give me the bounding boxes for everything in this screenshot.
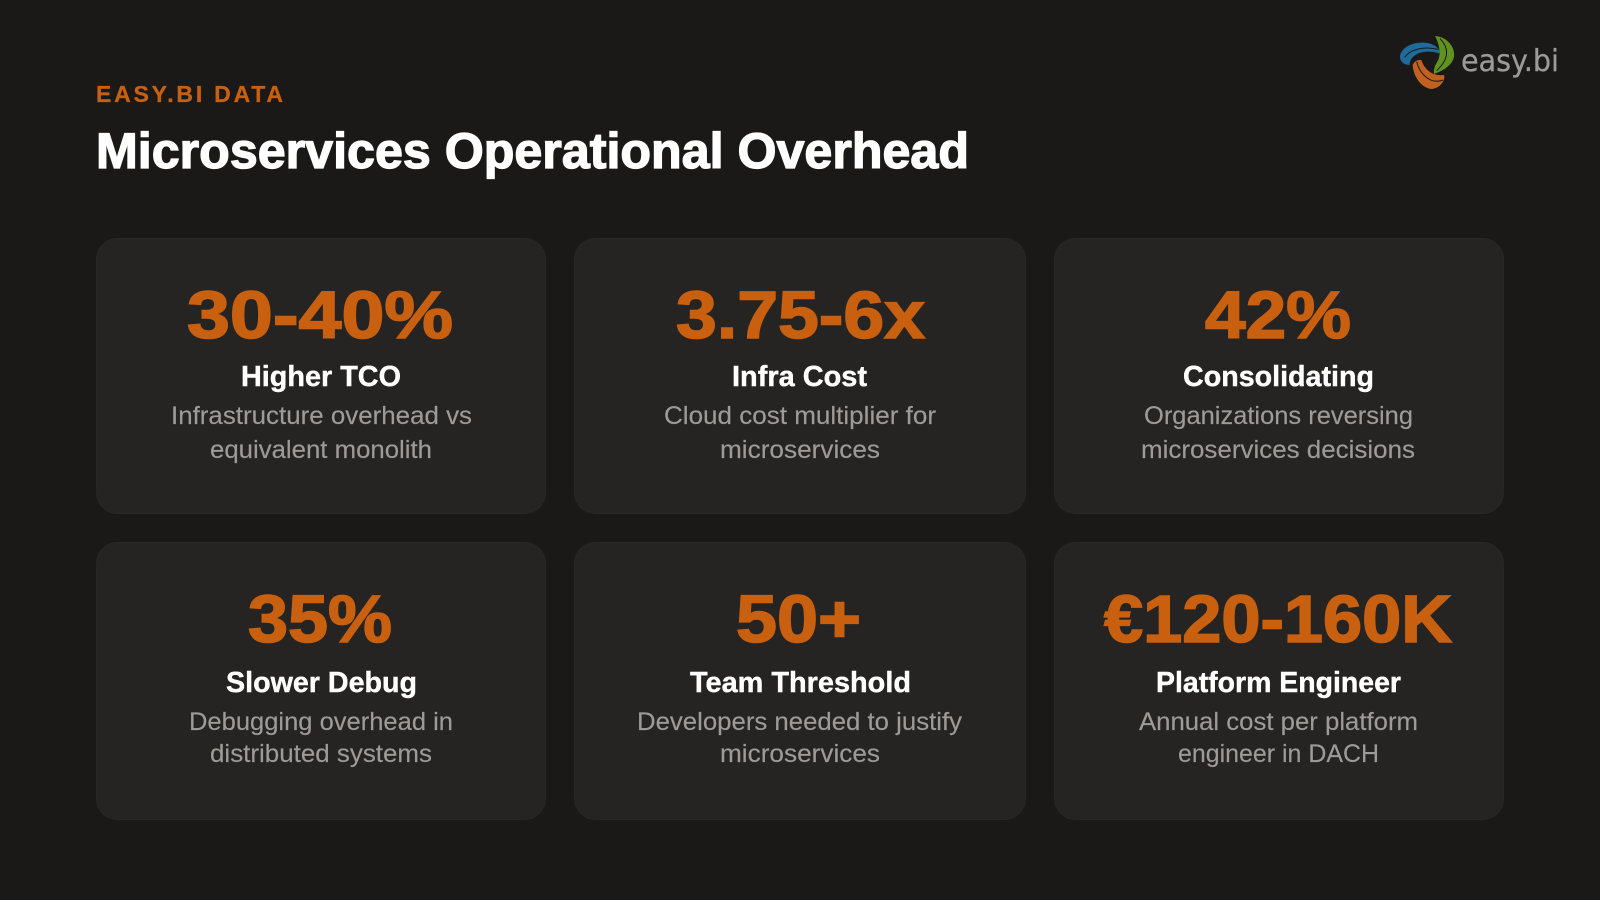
icon: logo mark [1400, 36, 1454, 89]
description: Infrastructure overhead vs [171, 402, 472, 430]
panel: slower debug [96, 542, 546, 820]
stat label: Slower Debug [226, 667, 417, 699]
description: Annual cost per platform [1139, 708, 1418, 736]
stat value: 3.75-6x [676, 278, 925, 353]
description line 2: equivalent monolith [210, 436, 432, 464]
panel: higher TCO [96, 238, 546, 514]
panel: consolidating [1054, 238, 1504, 514]
logo wordmark: easy.bi [1461, 44, 1559, 79]
panel: platform engineer [1054, 542, 1504, 820]
description: Organizations reversing [1144, 402, 1413, 430]
eyebrow label: EASY.BI DATA [96, 81, 283, 107]
stat value: 35% [248, 582, 392, 657]
description: Cloud cost multiplier for [664, 402, 936, 430]
description: Debugging overhead in [189, 708, 453, 736]
description: Developers needed to justify [637, 708, 963, 736]
description line 2: microservices decisions [1141, 436, 1415, 464]
stat label: Consolidating [1183, 361, 1374, 393]
stat value: 42% [1205, 278, 1351, 353]
stat value: 50+ [736, 582, 861, 657]
stat label: Higher TCO [241, 361, 401, 393]
logo: easy.bi [1400, 36, 1559, 89]
description line 2: engineer in DACH [1178, 740, 1379, 768]
stat label: Team Threshold [690, 667, 911, 699]
stat label: Infra Cost [732, 361, 867, 393]
description line 2: microservices [720, 436, 880, 464]
title: Microservices Operational Overhead [96, 123, 969, 179]
panel: team threshold [574, 542, 1026, 820]
description line 2: distributed systems [210, 740, 432, 768]
description line 2: microservices [720, 740, 880, 768]
stat value: 30-40% [187, 278, 453, 353]
stat value: €120-160K [1104, 582, 1452, 657]
panel: infra cost [574, 238, 1026, 514]
stat label: Platform Engineer [1156, 667, 1401, 699]
